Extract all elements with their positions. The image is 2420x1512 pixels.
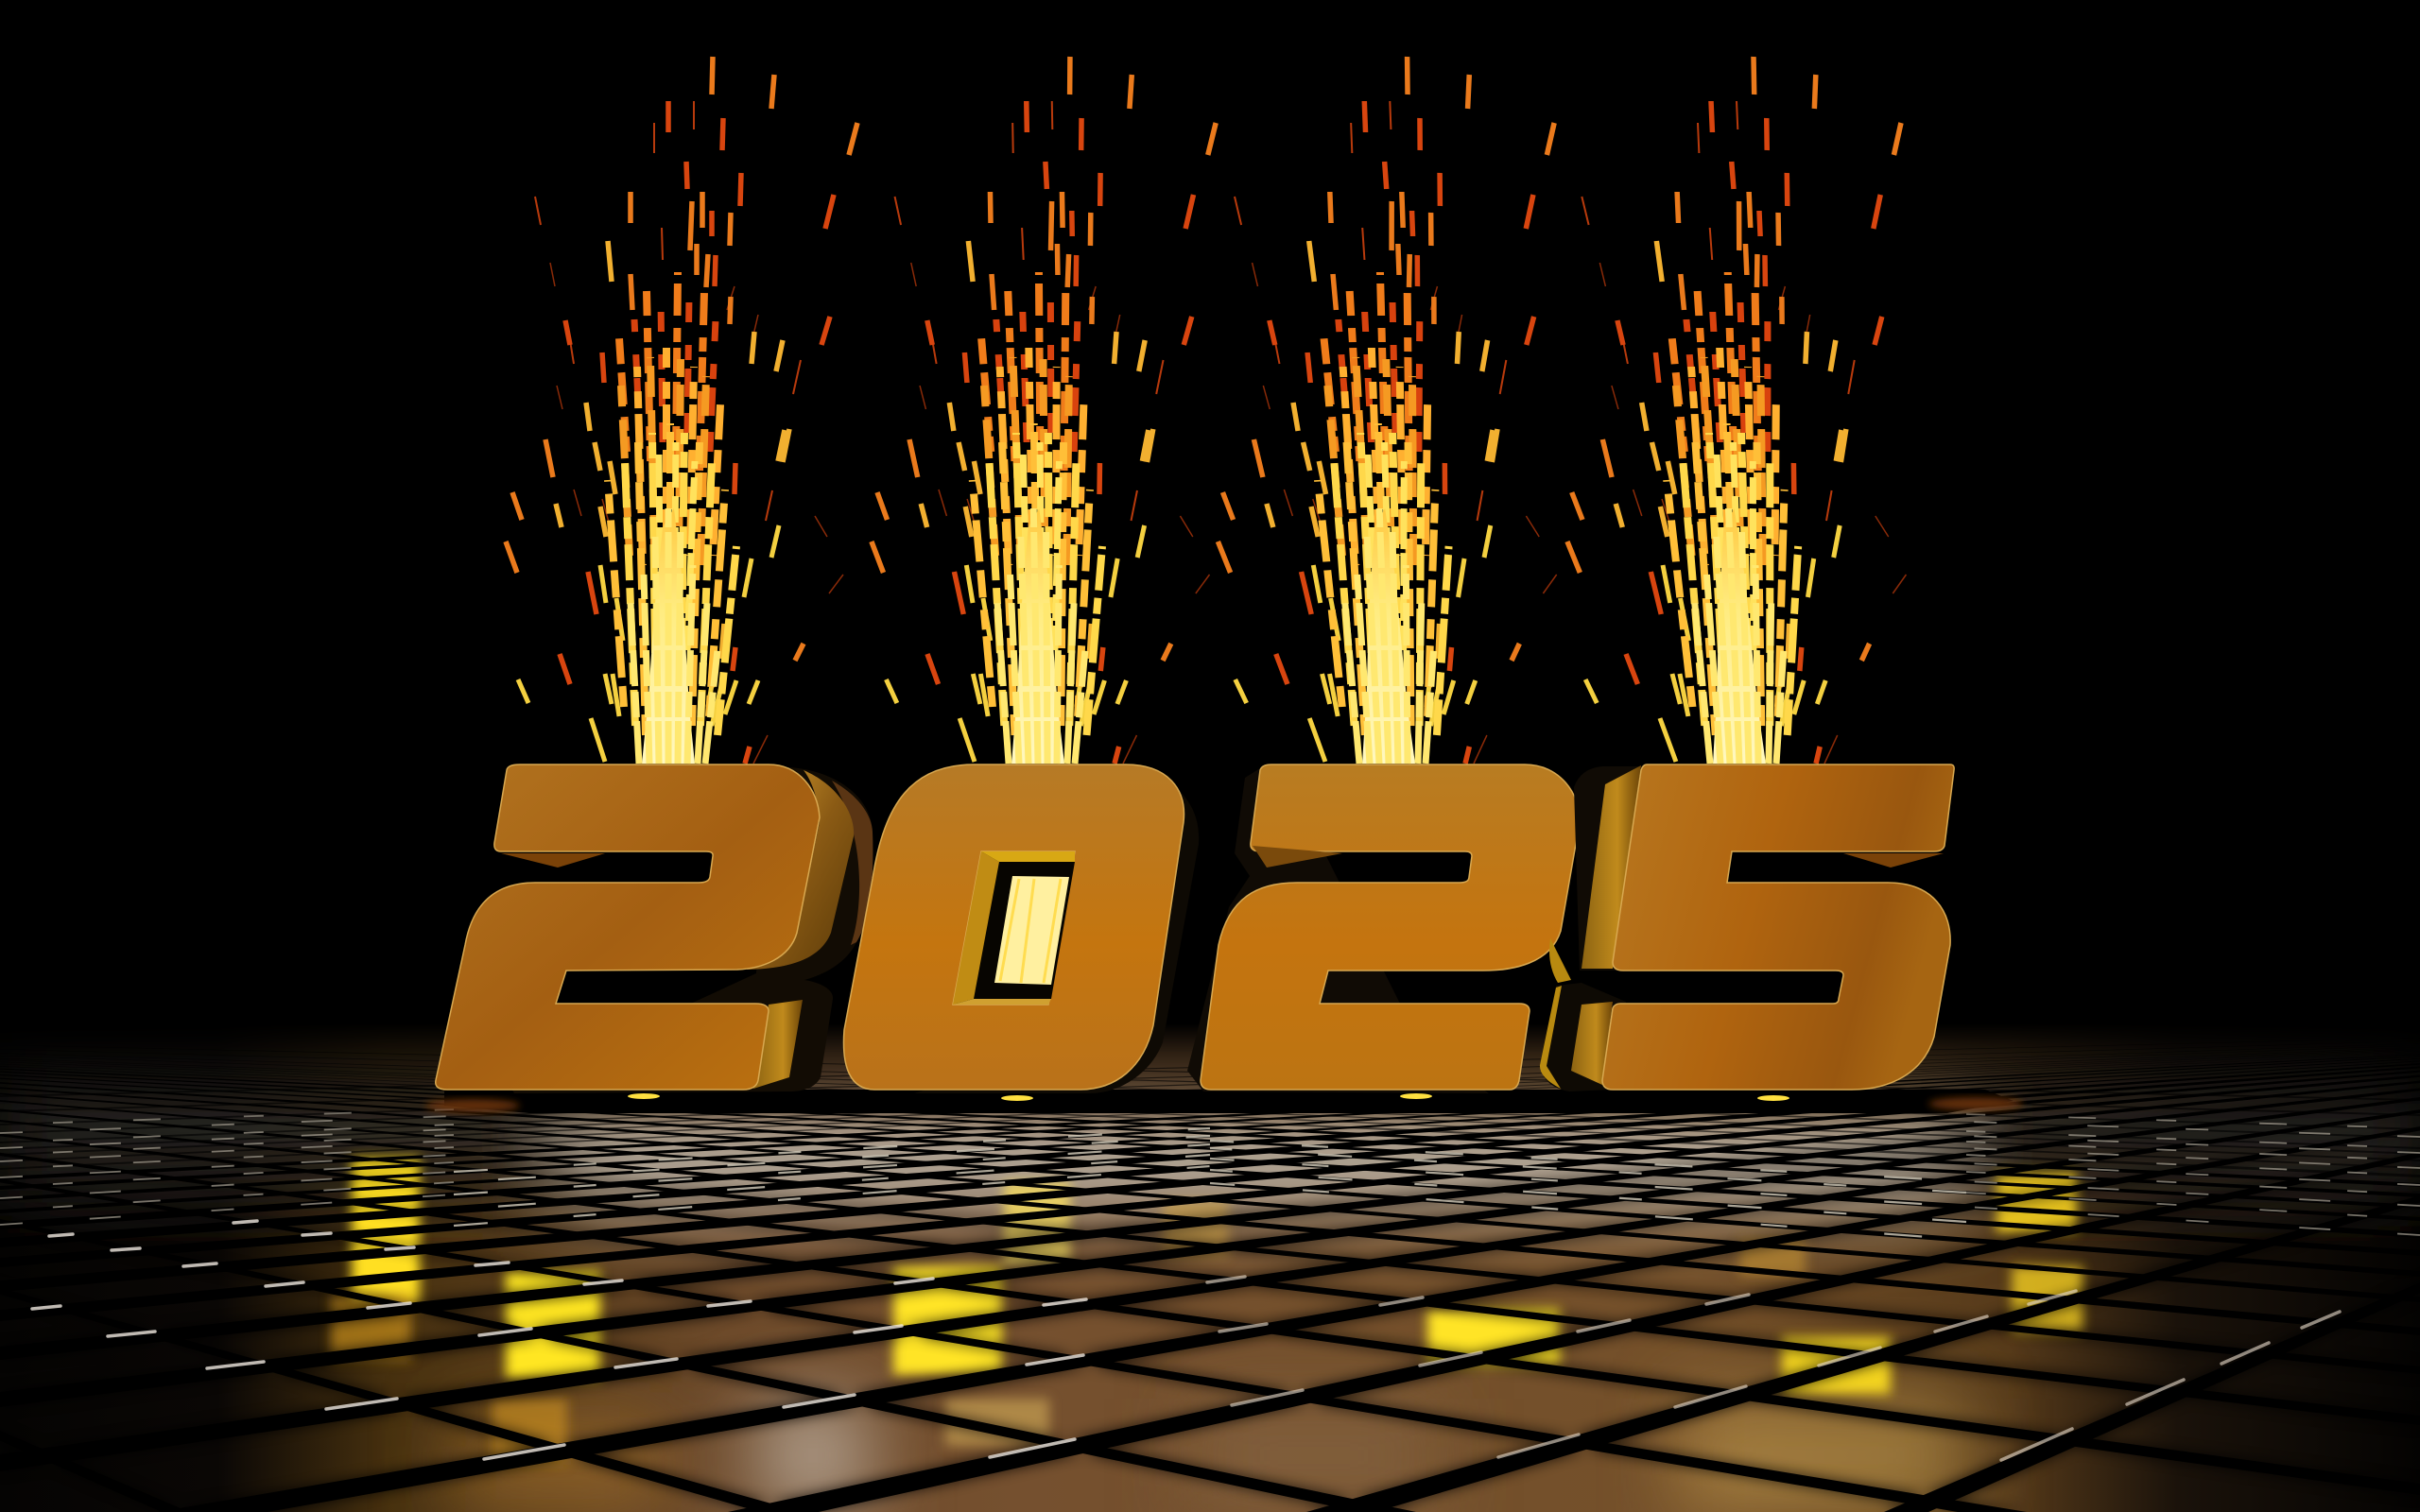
yellow outer rim: [1540, 938, 1571, 1089]
yellow glints under digits: [628, 1093, 1789, 1101]
back black extrusion: [914, 772, 1199, 1093]
front face with counter: [843, 765, 1184, 1090]
front face: [1201, 765, 1580, 1090]
front face: [436, 765, 820, 1090]
far tile highlights, right: [1966, 1114, 2420, 1235]
gold side lower: [753, 1000, 803, 1089]
numeral: 5: [1540, 765, 1954, 1091]
gold side lower: [1571, 1002, 1613, 1090]
counter: spark streaks: [1000, 879, 1061, 983]
sparks: fountain above first 2: [506, 57, 857, 764]
fade to black at horizon: [0, 1023, 2420, 1127]
contact shadow under numerals: [425, 1090, 2023, 1113]
floor base tone: [0, 1023, 2420, 1512]
back black extrusion lower: [1540, 983, 1626, 1091]
counter: sparks seen through the hole: [994, 876, 1069, 985]
reflected spark columns: [331, 1158, 2083, 1465]
far grooves, right vanishing point: [0, 1023, 2420, 1170]
counter: yellow top wall: [981, 851, 1075, 862]
specular streaks on tile edges, right: [1207, 1277, 2340, 1460]
orange floor glow left: [425, 1099, 520, 1112]
shadow band: [444, 1090, 2014, 1113]
gold side upper: [747, 770, 854, 970]
numeral: 0: [843, 765, 1199, 1093]
counter: gold left wall: [953, 851, 999, 1005]
back black extrusion: [1187, 768, 1489, 1093]
inner shadow glint under top bar: [1253, 846, 1342, 868]
inner glint under top bar: [1843, 853, 1944, 868]
numeral: second 2: [1187, 765, 1580, 1093]
orange floor glow right: [1928, 1097, 2023, 1110]
sparks: fountain above 5: [1547, 57, 1928, 764]
tile grooves running toward the right vanishing point: [0, 1023, 2420, 1512]
counter: black inner wall: [974, 862, 1075, 999]
gold side upper: [1582, 765, 1641, 969]
brown rim of extrusion: [832, 781, 873, 945]
back black extrusion: [510, 767, 873, 1093]
front face: [1602, 765, 1954, 1090]
far tile highlights, left: [0, 1109, 454, 1225]
far grooves, left vanishing point: [0, 1023, 2420, 1177]
numeral: first 2: [436, 765, 873, 1093]
inner shadow glint under top bar: [501, 853, 605, 868]
reflective tiled floor: [0, 850, 2420, 1512]
center tile highlights: [454, 1128, 1966, 1240]
silver sheen behind numerals: [0, 1068, 2420, 1512]
sparks: fountain above second 2: [1201, 57, 1578, 764]
sparks: fountain above 0: [863, 57, 1227, 764]
black wall above the horizon hiding sheen spill: [0, 850, 2420, 1023]
soft shading beside near tile grooves: [0, 1023, 2420, 1512]
counter: gold bottom edge: [953, 999, 1051, 1005]
specular streaks on tile edges, left and center: [32, 1221, 1086, 1459]
tile grooves running toward the left vanishing point: [0, 1023, 2420, 1512]
back black extrusion upper: [1574, 766, 1650, 971]
